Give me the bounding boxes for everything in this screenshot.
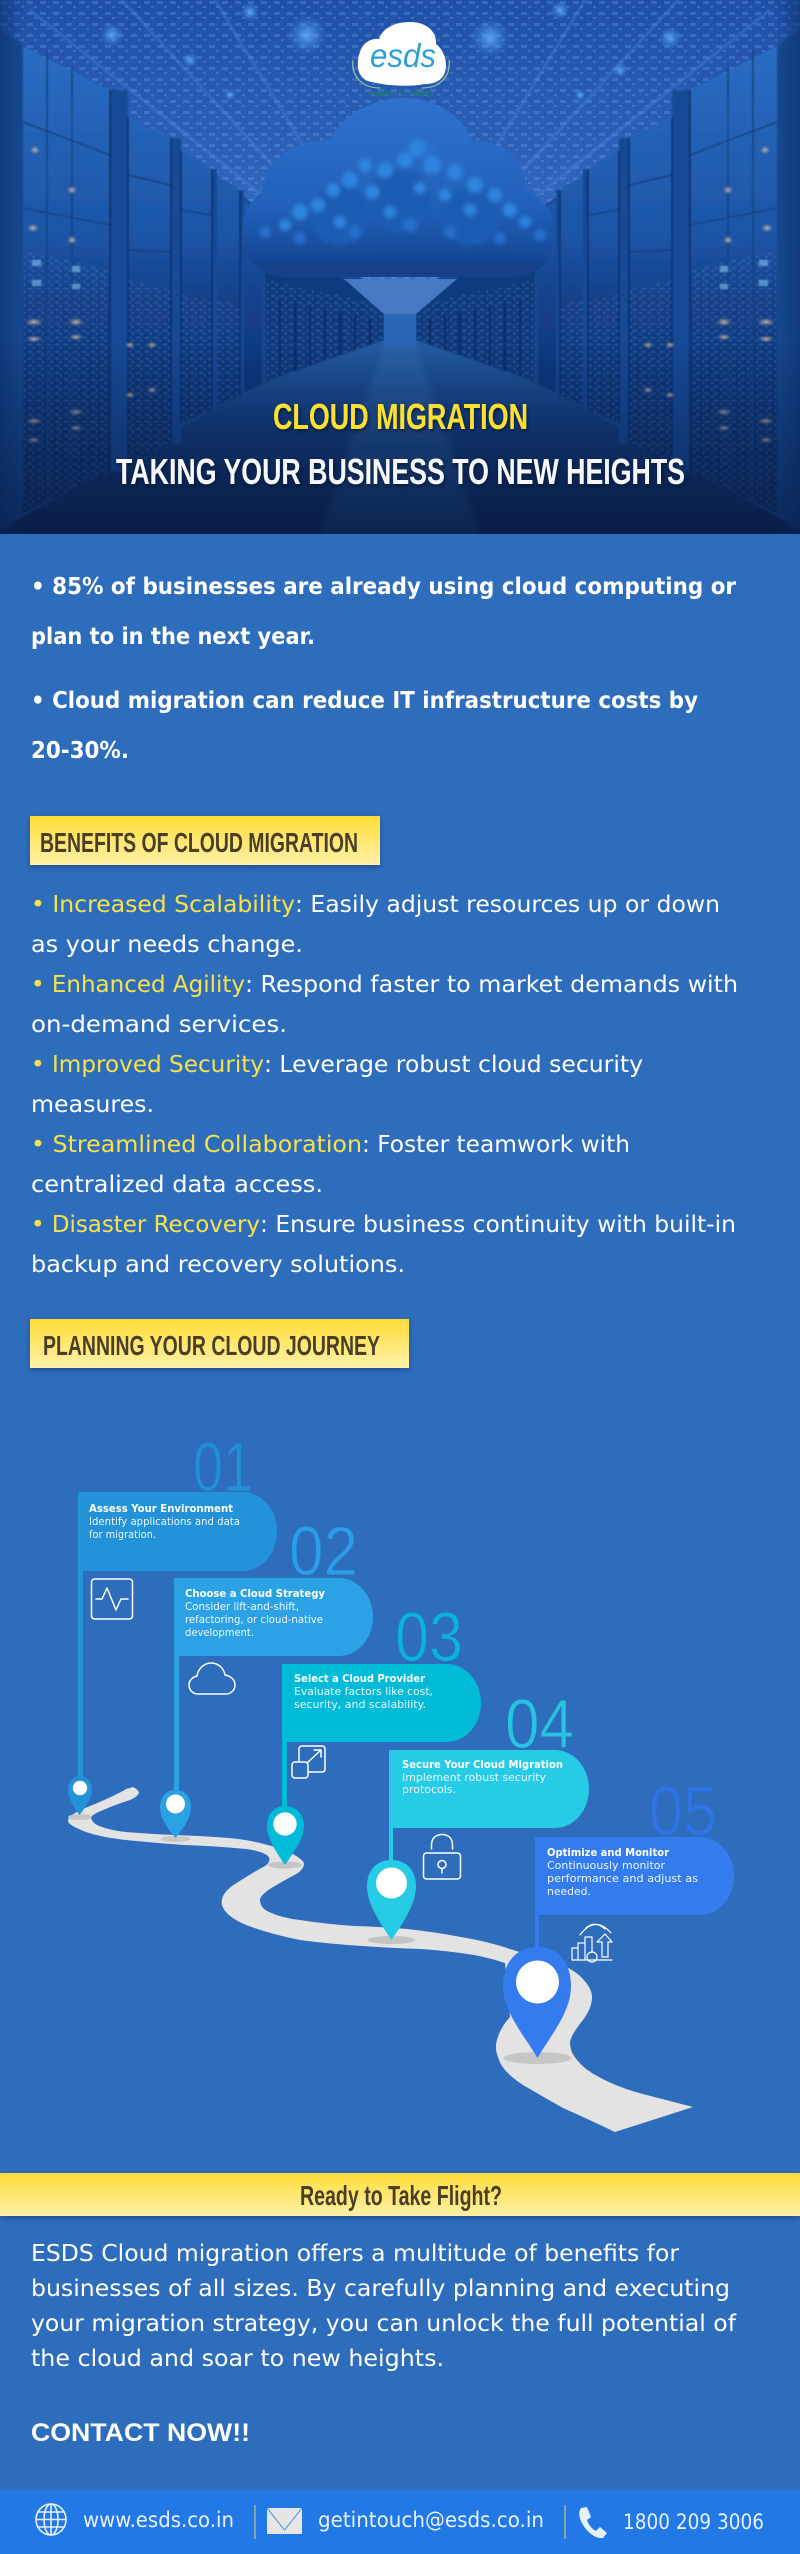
benefits list: : Leverage robust cloud security — [264, 1050, 643, 1078]
icon: globe — [36, 2504, 66, 2535]
benefits list: : Foster teamwork with — [362, 1130, 630, 1158]
pin 5 — [503, 1947, 572, 2064]
statistics text: 20-30%. — [31, 738, 129, 764]
statistics text: • Cloud migration can reduce IT infrastructure costs by — [31, 688, 698, 714]
benefits list: centralized data access. — [31, 1170, 323, 1198]
footer contact bar — [0, 2490, 800, 2554]
heading: planning — [30, 1319, 409, 1368]
statistics text — [31, 574, 737, 764]
phone number: 1800 209 3006 — [623, 2510, 764, 2535]
step 3: select a cloud provider: Select a Cloud Provider — [294, 1672, 426, 1685]
closing paragraph: your migration strategy, you can unlock the full potential of — [31, 2309, 737, 2337]
step 1: assess your environment: for migration. — [89, 1528, 156, 1541]
benefits list: • Streamlined Collaboration — [31, 1130, 362, 1158]
icon: expand squares — [292, 1746, 325, 1778]
benefits list: : Respond faster to market demands with — [245, 970, 738, 998]
pin 3 — [267, 1806, 304, 1868]
step 2: choose a cloud strategy: development. — [185, 1626, 254, 1639]
heading: planning: PLANNING YOUR CLOUD JOURNEY — [43, 1330, 380, 1361]
step 4: secure your cloud migration — [367, 1685, 589, 1944]
icon: padlock — [424, 1834, 460, 1879]
banner: ready to take flight: Ready to Take Flight? — [300, 2180, 502, 2211]
step 5: optimize and monitor: Continuously monitor — [547, 1859, 665, 1872]
step 5: optimize and monitor: performance and adjust as — [547, 1872, 698, 1885]
step 2: choose a cloud strategy: refactoring, or cloud-native — [185, 1613, 323, 1626]
benefits list: • Improved Security — [31, 1050, 264, 1078]
statistics text: plan to in the next year. — [31, 624, 315, 650]
step 5: optimize and monitor: Optimize and Monitor — [547, 1846, 670, 1859]
icon: cloud outline — [189, 1663, 235, 1694]
step 3: select a cloud provider — [267, 1598, 481, 1868]
icon: envelope — [267, 2508, 302, 2534]
benefits list: as your needs change. — [31, 930, 303, 958]
step 3: select a cloud provider: security, and scalability. — [294, 1698, 426, 1711]
step 4: secure your cloud migration: Implement robust security — [402, 1771, 546, 1784]
step 2: choose a cloud strategy: Choose a Cloud Strategy — [185, 1587, 325, 1600]
step 4: secure your cloud migration: 04 — [505, 1685, 574, 1763]
step 5: optimize and monitor: needed. — [547, 1885, 591, 1898]
pin 2 — [160, 1790, 191, 1842]
winding road — [68, 1787, 693, 2132]
website: www.esds.co.in — [83, 2508, 234, 2533]
step 2: choose a cloud strategy — [160, 1512, 373, 1842]
step 4: secure your cloud migration: protocols. — [402, 1783, 456, 1796]
logo: esds cloud: enabling futurability. — [369, 89, 433, 98]
closing paragraph: ESDS Cloud migration offers a multitude of benefits for — [31, 2239, 679, 2267]
step 3: select a cloud provider: Evaluate factors like cost, — [294, 1685, 433, 1698]
logo: esds cloud — [353, 22, 449, 98]
closing paragraph: businesses of all sizes. By carefully planning and executing — [31, 2274, 730, 2302]
step 5: optimize and monitor — [503, 1772, 734, 2064]
step 2: choose a cloud strategy: Consider lift-and-shift, — [185, 1600, 299, 1613]
logo: esds cloud: esds — [370, 37, 436, 74]
benefits list: : Ensure business continuity with built-in — [260, 1210, 736, 1238]
benefits list: backup and recovery solutions. — [31, 1250, 405, 1278]
pin 1 — [68, 1776, 92, 1820]
step 2: choose a cloud strategy: 02 — [289, 1512, 358, 1590]
step 3: select a cloud provider: 03 — [395, 1598, 463, 1676]
closing paragraph: the cloud and soar to new heights. — [31, 2344, 444, 2372]
icon: phone — [579, 2507, 607, 2538]
step 1: assess your environment: 01 — [193, 1428, 253, 1506]
benefits list: • Enhanced Agility — [31, 970, 245, 998]
pin 4 — [367, 1860, 416, 1944]
hero title: CLOUD MIGRATION — [273, 396, 528, 437]
benefits list: • Increased Scalability — [31, 890, 295, 918]
benefits list: on-demand services. — [31, 1010, 287, 1038]
hero title — [116, 396, 685, 492]
step 5: optimize and monitor: 05 — [649, 1772, 717, 1850]
step 1: assess your environment: Assess Your Environment — [89, 1502, 233, 1515]
benefits list — [31, 890, 738, 1278]
benefits list: measures. — [31, 1090, 154, 1118]
icon: pulse monitor — [92, 1579, 132, 1619]
benefits list: : Easily adjust resources up or down — [295, 890, 720, 918]
step 1: assess your environment: Identify applications and data — [89, 1515, 240, 1528]
step 4: secure your cloud migration: Secure Your Cloud Migration — [402, 1758, 563, 1771]
closing paragraph — [31, 2239, 737, 2372]
heading: benefits: BENEFITS OF CLOUD MIGRATION — [40, 827, 358, 858]
email: getintouch@esds.co.in — [318, 2508, 544, 2533]
hero banner: server room with cloud — [0, 0, 800, 534]
banner: ready to take flight — [0, 2173, 800, 2216]
heading: benefits — [30, 816, 380, 865]
step 1: assess your environment — [68, 1428, 277, 1820]
icon: growth chart — [572, 1924, 612, 1962]
statistics text: • 85% of businesses are already using cloud computing or — [31, 574, 737, 600]
call to action: CONTACT NOW!! — [31, 2419, 250, 2447]
illustration: large blue cloud — [240, 98, 560, 280]
benefits list: • Disaster Recovery — [31, 1210, 260, 1238]
